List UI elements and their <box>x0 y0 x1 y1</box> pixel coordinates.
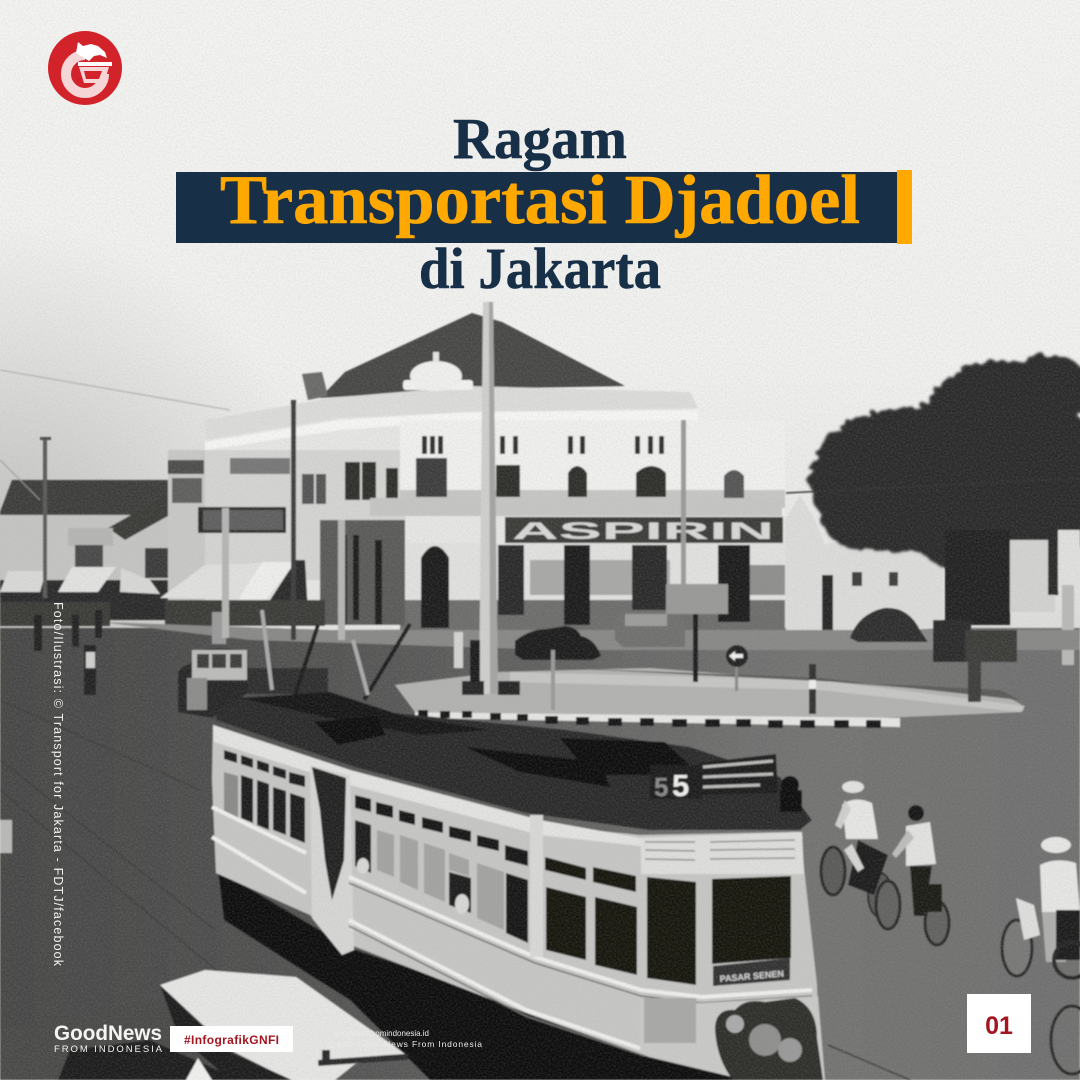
title banner <box>176 172 897 243</box>
cyclist 3 <box>1002 837 1080 978</box>
body <box>212 725 820 1080</box>
second tram roof bottom left <box>58 970 408 1080</box>
brand: GoodNews from Indonesia <box>54 1022 163 1055</box>
road surface <box>0 628 1080 1080</box>
social handles <box>327 1028 482 1049</box>
lower left road shading and rails <box>0 700 910 1080</box>
front upper louvres <box>641 832 804 874</box>
tram <box>212 692 825 1080</box>
photo credit: Foto/Ilustrasi: © Transport for Jakarta - FDTJ/facebook <box>51 602 65 967</box>
route number <box>650 765 702 799</box>
cyclists <box>821 781 1080 1074</box>
main building: aspirin corner <box>198 313 786 630</box>
tree trunks and far right <box>945 525 1080 665</box>
title line: Ragam: Ragam <box>453 106 627 171</box>
headlamp cluster <box>715 998 823 1080</box>
belt lines <box>212 807 812 1070</box>
fourth bicycle wheel <box>1051 1006 1080 1074</box>
middle windows transoms <box>355 795 528 866</box>
road signs <box>551 584 981 714</box>
awnings <box>160 560 325 626</box>
photo: Jakarta street scene <box>0 302 1080 1080</box>
striped curb <box>415 712 900 727</box>
social handles: @gnfi Good News From Indonesia <box>327 1039 482 1049</box>
hashtag badge <box>170 1026 293 1052</box>
page number <box>967 994 1031 1053</box>
lower walls <box>400 543 785 601</box>
poles and wires <box>0 370 1080 640</box>
hashtag badge: #InfografikGNFI <box>184 1033 279 1047</box>
title line: di Jakarta: di Jakarta <box>419 236 661 301</box>
tram: PASAR SENEN <box>719 968 784 984</box>
middle windows louvres <box>377 830 504 930</box>
title line: Transportasi Djadoel: Transportasi Djadoel <box>220 162 860 239</box>
traffic island <box>395 668 1025 728</box>
logo: red garuda emblem <box>48 31 122 105</box>
small white building <box>785 495 943 638</box>
background: paper and sky <box>0 0 1080 640</box>
door column <box>310 765 354 955</box>
cyclist 1 <box>821 781 892 917</box>
title <box>176 106 912 301</box>
left upper band <box>213 725 803 846</box>
banner accent <box>897 170 912 244</box>
page number: 01 <box>985 1012 1013 1040</box>
brand: GoodNews from Indonesia: FROM INDONESIA <box>54 1044 163 1055</box>
tram: 5 <box>654 772 668 802</box>
roof <box>320 313 625 398</box>
trolley poles <box>262 610 410 700</box>
tree <box>810 354 1080 580</box>
main building: aspirin corner: ASPIRIN <box>512 518 774 545</box>
tram undercarriage <box>218 870 760 1080</box>
corner windows <box>545 857 791 985</box>
roof <box>216 697 812 830</box>
cyclist 2 <box>876 805 949 945</box>
rear windows <box>224 750 305 843</box>
brand: GoodNews from Indonesia: GoodNews <box>54 1022 162 1045</box>
front lower body <box>640 996 825 1080</box>
car left <box>178 648 328 718</box>
central pole <box>454 302 520 695</box>
people far left <box>0 602 226 695</box>
left shops <box>0 450 208 620</box>
pillars <box>530 815 543 957</box>
small sign at left edge <box>0 820 12 853</box>
social handles: goodnewsfromindonesia.id <box>334 1028 429 1038</box>
facade <box>205 388 786 630</box>
tram: 5 <box>672 768 689 803</box>
far pavement band <box>100 622 1080 650</box>
vehicles background <box>515 608 1017 662</box>
aspirin sign <box>505 517 783 543</box>
